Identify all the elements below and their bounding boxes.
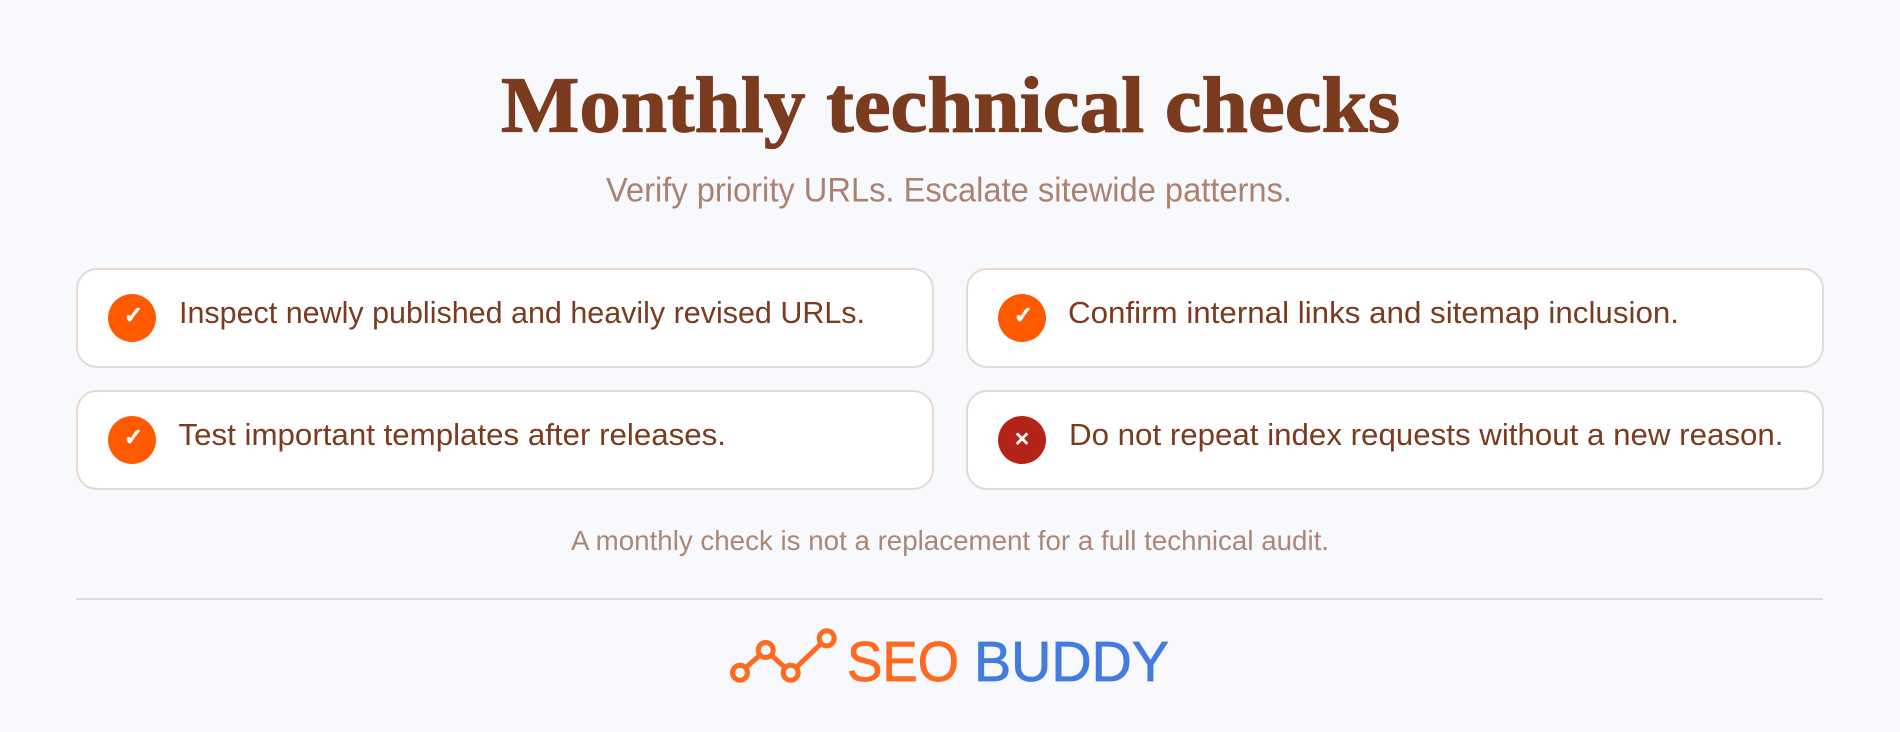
panel: warning card [967, 391, 1823, 489]
icon: orange check: ✓ [124, 303, 143, 329]
card text 2: Confirm internal links and sitemap inclusion. [1068, 295, 1679, 330]
title: Monthly technical checks [501, 62, 1400, 150]
icon: orange check [998, 294, 1046, 342]
logo word: SEO: SEO [847, 630, 959, 694]
subtitle: Verify priority URLs. Escalate sitewide patterns. [606, 172, 1292, 210]
card text 3: Test important templates after releases. [178, 417, 726, 452]
card text 1: Inspect newly published and heavily revised URLs. [179, 295, 865, 330]
icon: line chart [732, 631, 834, 680]
footnote: A monthly check is not a replacement for a full technical audit. [571, 525, 1329, 556]
panel: check card 1 [77, 269, 933, 367]
logo: SEO Buddy [732, 630, 1169, 694]
icon: orange check [108, 416, 156, 464]
panel: check card 2 [967, 269, 1823, 367]
icon: orange check: ✓ [124, 425, 143, 451]
logo word: BUDDY: BUDDY [974, 630, 1169, 694]
icon: red cross: × [1015, 425, 1029, 453]
icon: orange check [108, 294, 156, 342]
icon: orange check: ✓ [1014, 303, 1033, 329]
panel: check card 3 [77, 391, 933, 489]
card text 4: Do not repeat index requests without a new reason. [1069, 417, 1784, 452]
icon: red cross [998, 416, 1046, 464]
